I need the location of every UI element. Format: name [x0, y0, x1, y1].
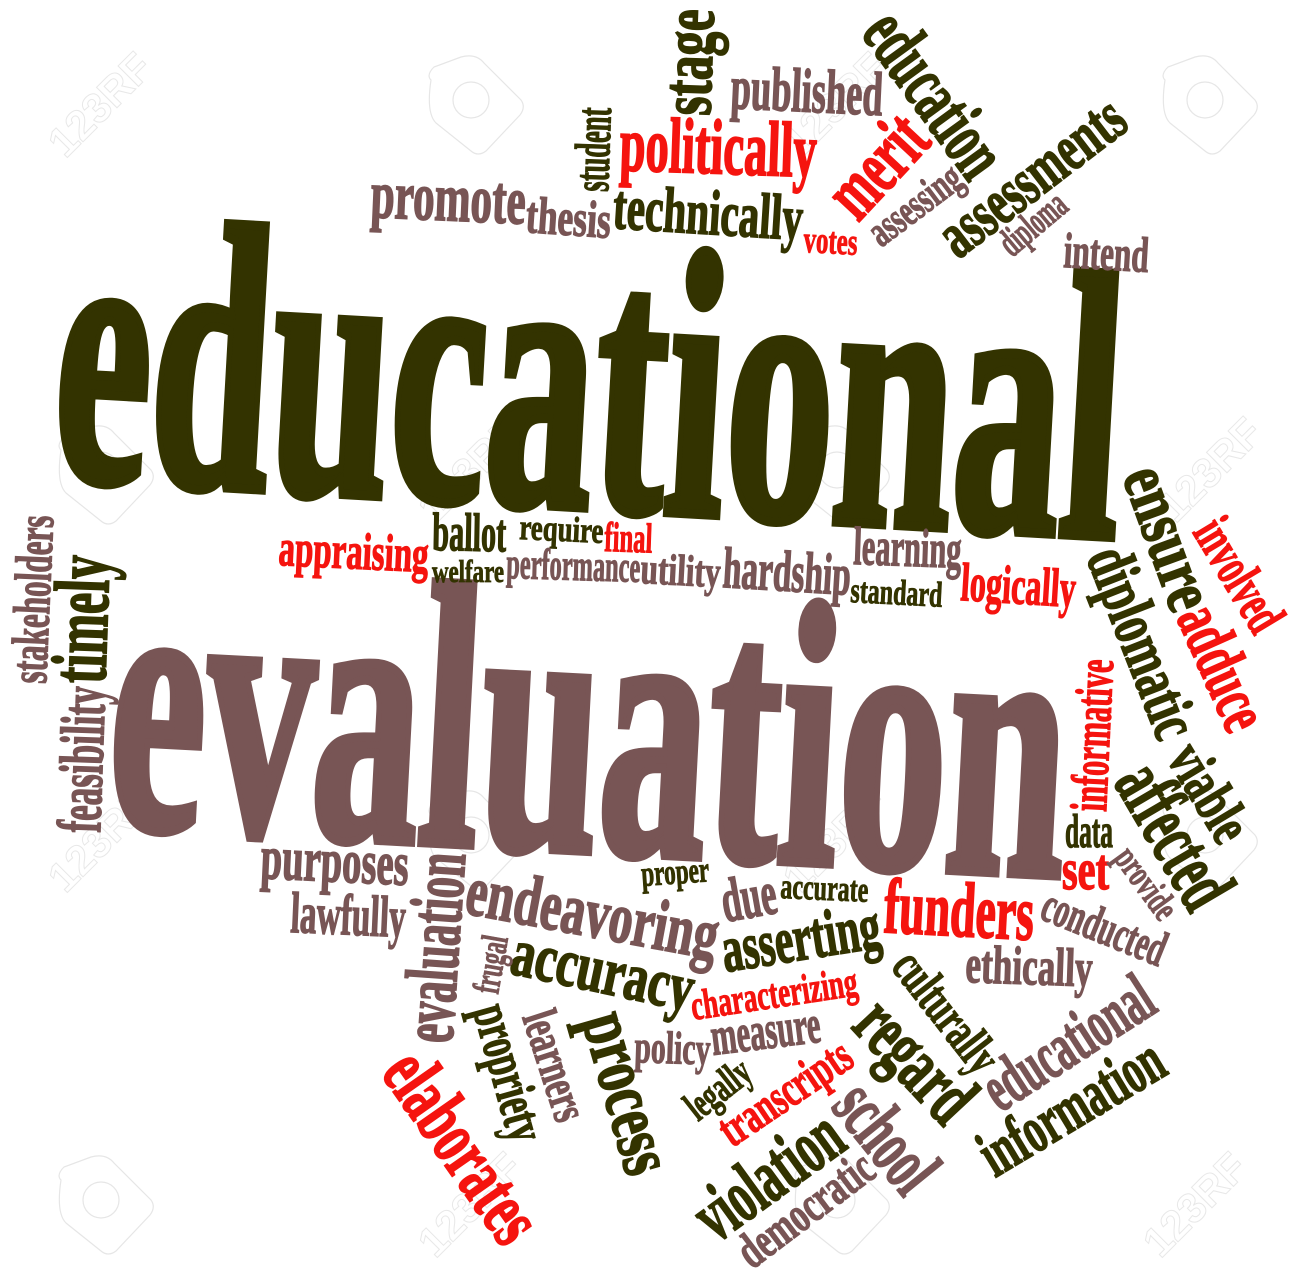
word: thesis: thesis	[524, 187, 613, 250]
word: democratic: democratic	[725, 1139, 885, 1277]
word: lawfully: lawfully	[289, 880, 407, 950]
word: policy: policy	[634, 1021, 711, 1075]
word: accurate: accurate	[780, 866, 869, 910]
word: votes: votes	[803, 219, 859, 264]
word: appraising: appraising	[277, 520, 430, 584]
word: legally: legally	[676, 1049, 761, 1130]
watermarks: 123RF	[39, 43, 161, 166]
word: funders: funders	[882, 862, 1036, 957]
word: assessments: assessments	[923, 81, 1140, 272]
word: final: final	[604, 515, 653, 563]
word: information: information	[965, 1023, 1178, 1191]
word: culturally: culturally	[881, 939, 1012, 1085]
word: measure: measure	[707, 994, 824, 1067]
word: ethically: ethically	[965, 934, 1094, 998]
word: student: student	[563, 106, 622, 192]
word: set: set	[1062, 837, 1109, 902]
word: assessing: assessing	[858, 153, 972, 256]
word: ensure: ensure	[1107, 455, 1230, 621]
word: timely: timely	[35, 554, 126, 685]
word: conducted: conducted	[1034, 876, 1175, 977]
word: require: require	[519, 507, 604, 551]
word: informative: informative	[1061, 658, 1125, 813]
watermarks: 123RF	[39, 778, 161, 901]
word: utility: utility	[639, 544, 722, 597]
word: endeavoring: endeavoring	[460, 850, 725, 975]
watermarks: 123RF	[1149, 408, 1271, 531]
word: intend: intend	[1062, 222, 1151, 283]
word: violation: violation	[677, 1093, 859, 1258]
word: stakeholders: stakeholders	[1, 514, 65, 685]
word: diplomatic: diplomatic	[1072, 536, 1213, 749]
word: school: school	[817, 1065, 956, 1209]
word: merit: merit	[807, 95, 945, 235]
word: learners: learners	[512, 1003, 600, 1128]
word: asserting: asserting	[716, 890, 885, 987]
word: process: process	[566, 1002, 690, 1183]
watermarks: 123RF	[774, 43, 896, 166]
word: performance: performance	[506, 539, 641, 592]
word: provide: provide	[1106, 839, 1187, 928]
word: politically: politically	[618, 100, 818, 194]
word: due: due	[716, 859, 782, 936]
watermarks: 123RF	[409, 1143, 531, 1266]
word: purposes: purposes	[259, 824, 410, 899]
word: standard: standard	[850, 570, 944, 615]
word: diploma: diploma	[989, 182, 1076, 265]
word: ballot: ballot	[432, 502, 507, 563]
word: educational (small): educational	[967, 959, 1168, 1126]
watermarks: 123RF	[409, 408, 531, 531]
word: technically: technically	[611, 171, 805, 254]
word: evaluation (small): evaluation	[387, 850, 482, 1045]
word: frugal: frugal	[466, 932, 517, 997]
watermarks: 123RF	[1134, 1143, 1256, 1266]
word: accuracy: accuracy	[505, 913, 702, 1026]
word: data: data	[1065, 805, 1113, 858]
watermarks: 123RF	[774, 778, 896, 901]
word: promote: promote	[369, 156, 528, 239]
word: transcripts: transcripts	[707, 1027, 863, 1157]
word: regard: regard	[838, 979, 995, 1140]
word: characterizing: characterizing	[688, 960, 861, 1030]
word: propriety: propriety	[460, 997, 558, 1148]
word: feasibility: feasibility	[46, 685, 119, 833]
word: hardship: hardship	[721, 535, 853, 608]
word: education: education	[846, 0, 1024, 193]
word: learning: learning	[853, 516, 963, 580]
word: published: published	[729, 54, 884, 129]
word: viable: viable	[1155, 731, 1265, 854]
word: welfare: welfare	[432, 553, 504, 589]
word: logically: logically	[959, 552, 1078, 619]
word: proper: proper	[640, 849, 710, 894]
